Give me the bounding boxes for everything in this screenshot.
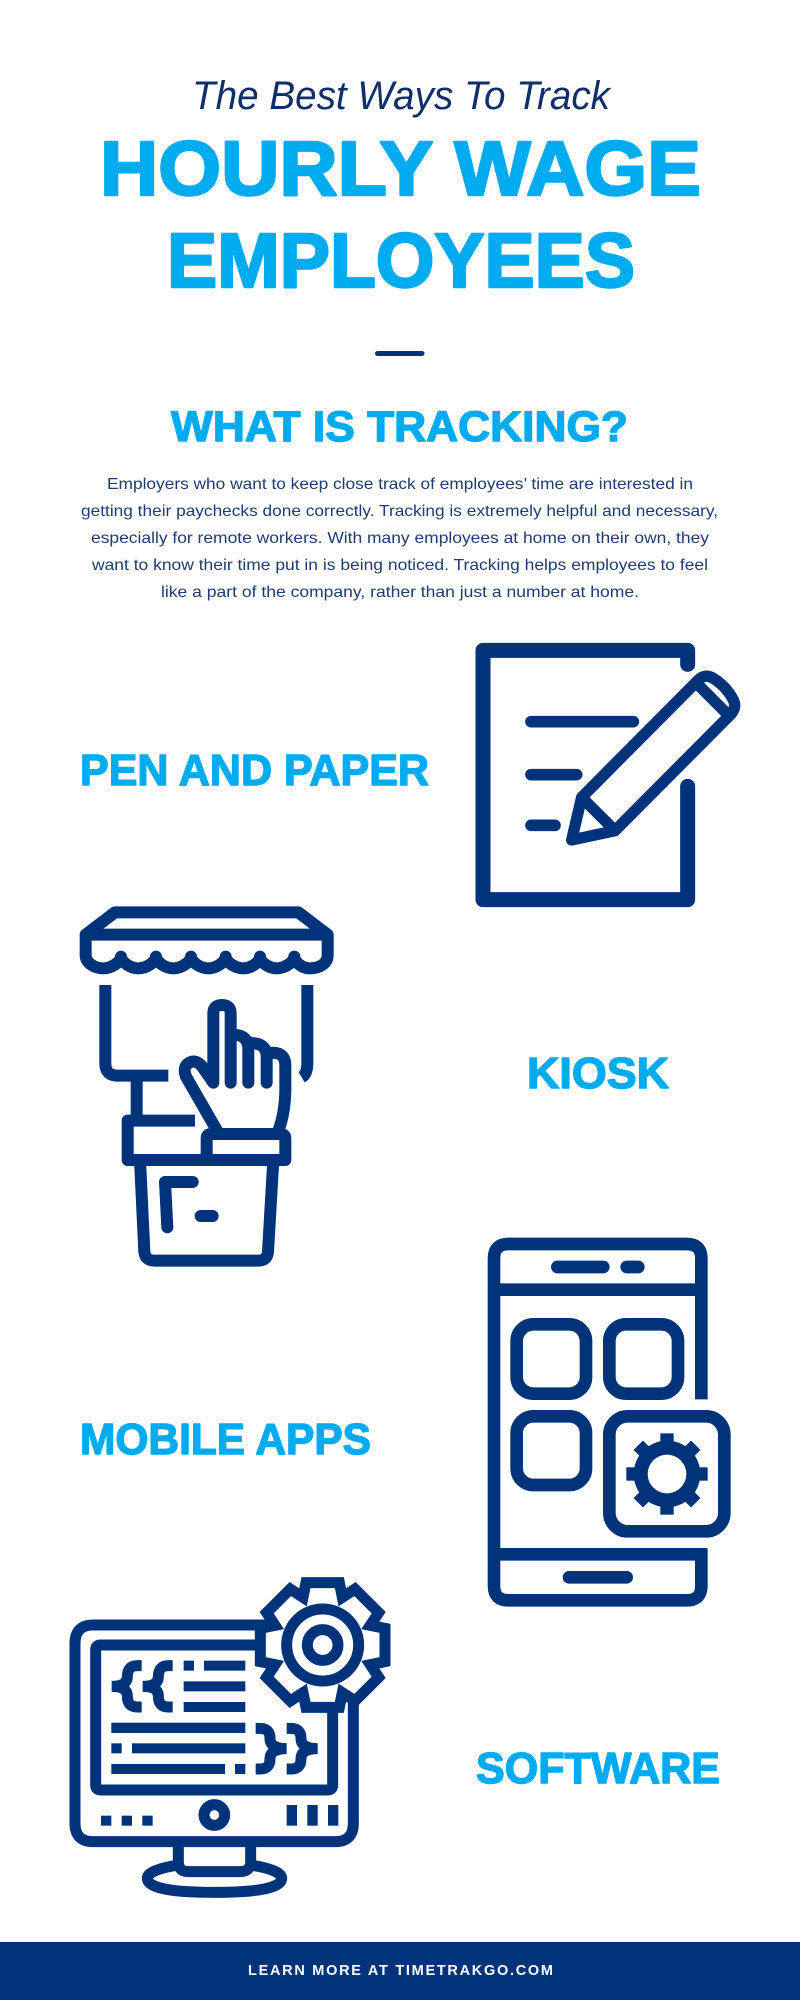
title line 1: HOURLY WAGE	[100, 126, 701, 212]
body paragraph: especially for remote workers. With many employees at home on their own, they	[91, 530, 709, 547]
title line 2: EMPLOYEES	[167, 218, 635, 304]
label: software: SOFTWARE	[476, 1744, 720, 1793]
body paragraph: getting their paychecks done correctly. Tracking is extremely helpful and necessary,	[81, 503, 718, 520]
body paragraph: want to know their time put in is being noticed. Tracking helps employees to feel	[91, 557, 708, 574]
body paragraph	[81, 476, 718, 601]
icon: cog outline	[260, 1583, 385, 1707]
body paragraph: like a part of the company, rather than just a number at home.	[161, 584, 639, 601]
icon: paper and pencil	[483, 650, 735, 900]
label: pen and paper: PEN AND PAPER	[80, 746, 429, 795]
title divider	[375, 351, 424, 356]
footer text: LEARN MORE AT TIMETRAKGO.COM	[248, 1963, 553, 1979]
subtitle: The Best Ways To Track	[192, 74, 612, 118]
icon: mobile phone with apps	[494, 1244, 724, 1600]
icon: monitor with code and gear	[75, 1583, 385, 1892]
body paragraph: Employers who want to keep close track of employees’ time are interested in	[107, 476, 693, 493]
label: kiosk: KIOSK	[527, 1049, 669, 1098]
section heading: WHAT IS TRACKING?	[171, 403, 628, 451]
label: mobile apps: MOBILE APPS	[80, 1415, 371, 1464]
footer band	[0, 1942, 800, 2000]
icon: kiosk with pointing hand	[86, 912, 328, 1261]
icon: settings gear	[626, 1433, 708, 1515]
